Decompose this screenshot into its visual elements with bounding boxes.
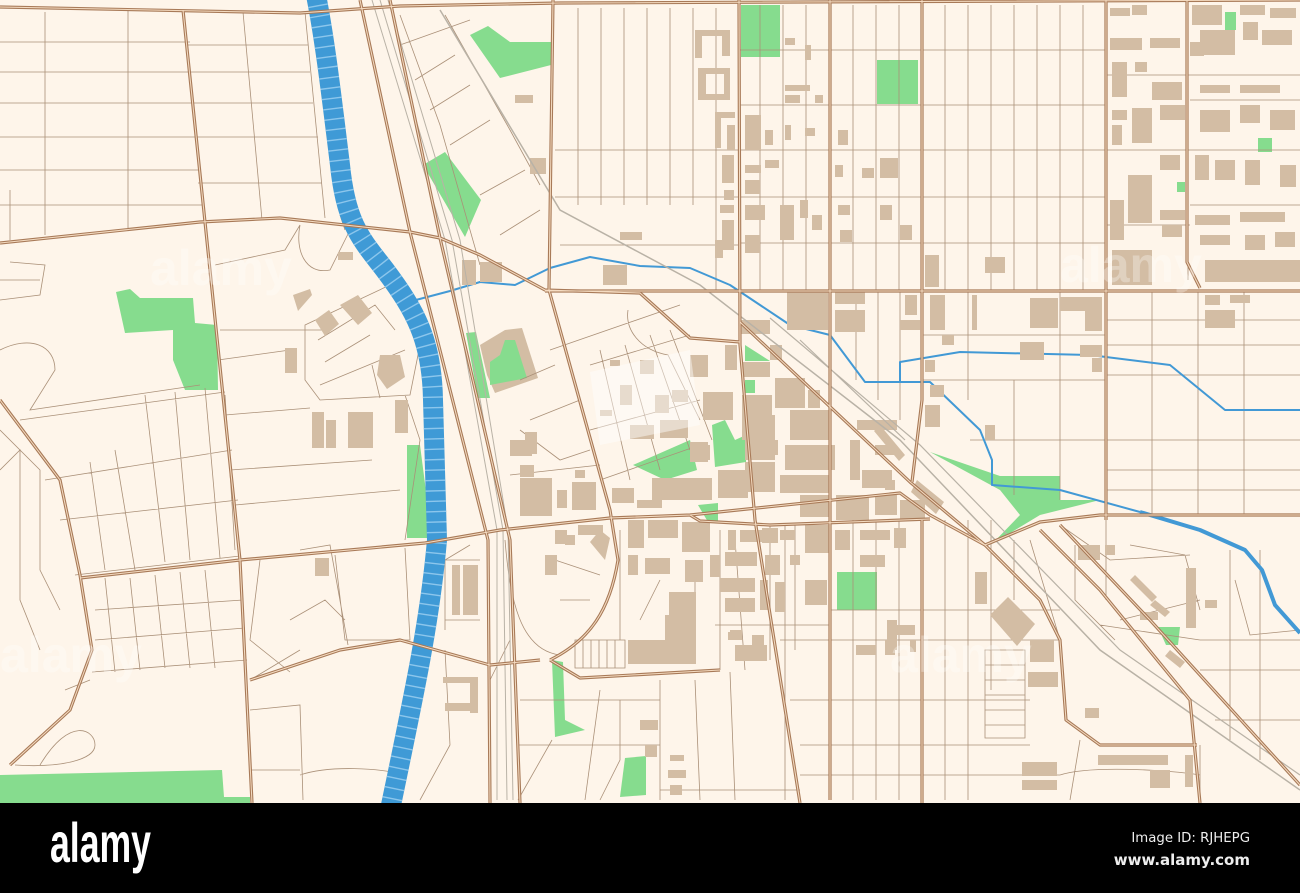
- image id: Image ID: RJHEPG: [1131, 831, 1250, 846]
- campus wash: [590, 350, 700, 445]
- stock watermarks: alamy: [1060, 237, 1202, 293]
- footer bar: [0, 803, 1300, 893]
- stock watermarks: alamy: [150, 240, 292, 296]
- rail and freeway lanes: [372, 0, 1300, 800]
- website: www.alamy.com: [1114, 851, 1250, 869]
- stock watermarks: [0, 237, 1202, 683]
- buildings: [285, 5, 1300, 795]
- footer logo: alamy: [50, 811, 151, 874]
- stock watermarks: alamy: [890, 627, 1032, 683]
- stadium building: [480, 328, 538, 393]
- stock watermarks: alamy: [0, 627, 142, 683]
- creek and waterways: [412, 257, 1300, 633]
- river: [316, 0, 437, 810]
